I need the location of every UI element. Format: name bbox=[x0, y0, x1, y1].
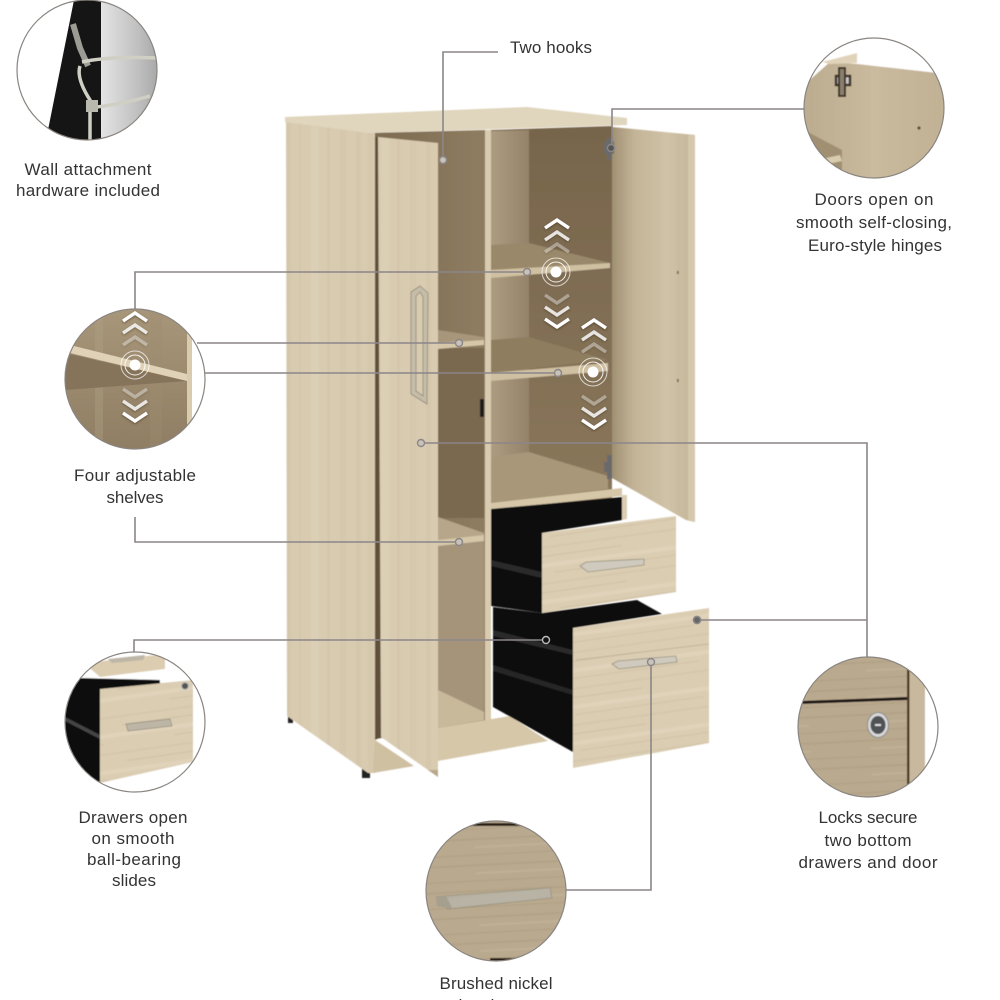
callout line: shelf right lower bbox=[205, 372, 558, 374]
magnet catch bbox=[480, 399, 484, 417]
cabinet side panel bbox=[286, 120, 368, 773]
caption: adjustable shelves bbox=[74, 466, 196, 507]
caption: hinges: smooth self-closing, bbox=[796, 213, 952, 232]
caption: wall attachment bbox=[16, 160, 160, 200]
callout dots bbox=[418, 144, 700, 666]
panel: lock detail bbox=[797, 657, 938, 798]
caption: drawer slides bbox=[78, 808, 188, 890]
panel: brushed nickel handle detail bbox=[426, 821, 567, 962]
caption: brushed nickel hardware: Brushed nickel bbox=[440, 974, 552, 993]
cabinet top bbox=[285, 107, 627, 133]
caption: wall attachment: Wall attachment bbox=[24, 160, 152, 179]
callout line: drawer slide bbox=[134, 640, 546, 655]
panel: drawer slide detail bbox=[65, 652, 205, 793]
left compartment shelves bbox=[438, 330, 484, 546]
caption: locks bbox=[798, 808, 938, 872]
lower drawer box bbox=[493, 600, 662, 752]
caption: wall attachment: hardware included bbox=[16, 181, 160, 200]
panel: adjustable shelf detail bbox=[65, 309, 205, 449]
caption: drawer slides: slides bbox=[112, 871, 156, 890]
right compartment shelves bbox=[491, 243, 622, 510]
cabinet interior left compartment bbox=[368, 130, 485, 740]
caption: hinges: Euro-style hinges bbox=[808, 236, 942, 255]
caption: locks: two bottom bbox=[824, 831, 912, 850]
callout line: shelf top bbox=[135, 272, 527, 309]
center divider bbox=[485, 130, 491, 730]
callout line: shelf left lower bbox=[135, 517, 459, 542]
caption: locks: Locks secure bbox=[818, 808, 918, 827]
lower drawer face bbox=[573, 608, 709, 768]
caption: drawer slides: on smooth bbox=[92, 829, 174, 848]
cabinet floor plinth bbox=[438, 716, 548, 761]
icon: adjust shelf up and down, lower shelf bbox=[579, 320, 607, 428]
callout line: hinges bbox=[612, 109, 805, 145]
lower drawer handle bbox=[612, 656, 677, 669]
cabinet illustration bbox=[285, 107, 709, 778]
callout line: drawer lock bbox=[697, 619, 867, 621]
upper drawer handle bbox=[580, 559, 644, 572]
caption: locks: drawers and door bbox=[798, 853, 938, 872]
icon: adjust shelf up and down, upper shelf bbox=[542, 220, 570, 327]
caption: hinges bbox=[796, 190, 952, 255]
callout line: two hooks bbox=[443, 52, 498, 160]
upper drawer face bbox=[542, 516, 676, 613]
heading: two hooks: Two hooks bbox=[510, 38, 592, 57]
callout line: door lock bbox=[421, 443, 867, 657]
caption: hinges: Doors open on bbox=[814, 190, 934, 209]
callout line: shelf left upper bbox=[197, 342, 459, 344]
callout line: handle bbox=[566, 662, 651, 890]
left door handle bbox=[411, 286, 428, 404]
lock bbox=[693, 616, 701, 624]
panel: wall attachment detail bbox=[17, 0, 157, 140]
caption: adjustable shelves: Four adjustable bbox=[74, 466, 196, 485]
right door background strip and feet bbox=[288, 495, 627, 778]
caption: drawer slides: ball-bearing bbox=[87, 850, 181, 869]
right door bbox=[612, 127, 695, 522]
caption: adjustable shelves: shelves bbox=[106, 488, 164, 507]
left door bbox=[375, 137, 438, 777]
upper drawer box bbox=[491, 497, 622, 613]
right compartment back bbox=[491, 126, 612, 510]
caption: drawer slides: Drawers open bbox=[78, 808, 188, 827]
door hinges bbox=[604, 138, 614, 479]
panel: hinge detail bbox=[804, 38, 945, 179]
cabinet front edge bbox=[368, 133, 375, 773]
